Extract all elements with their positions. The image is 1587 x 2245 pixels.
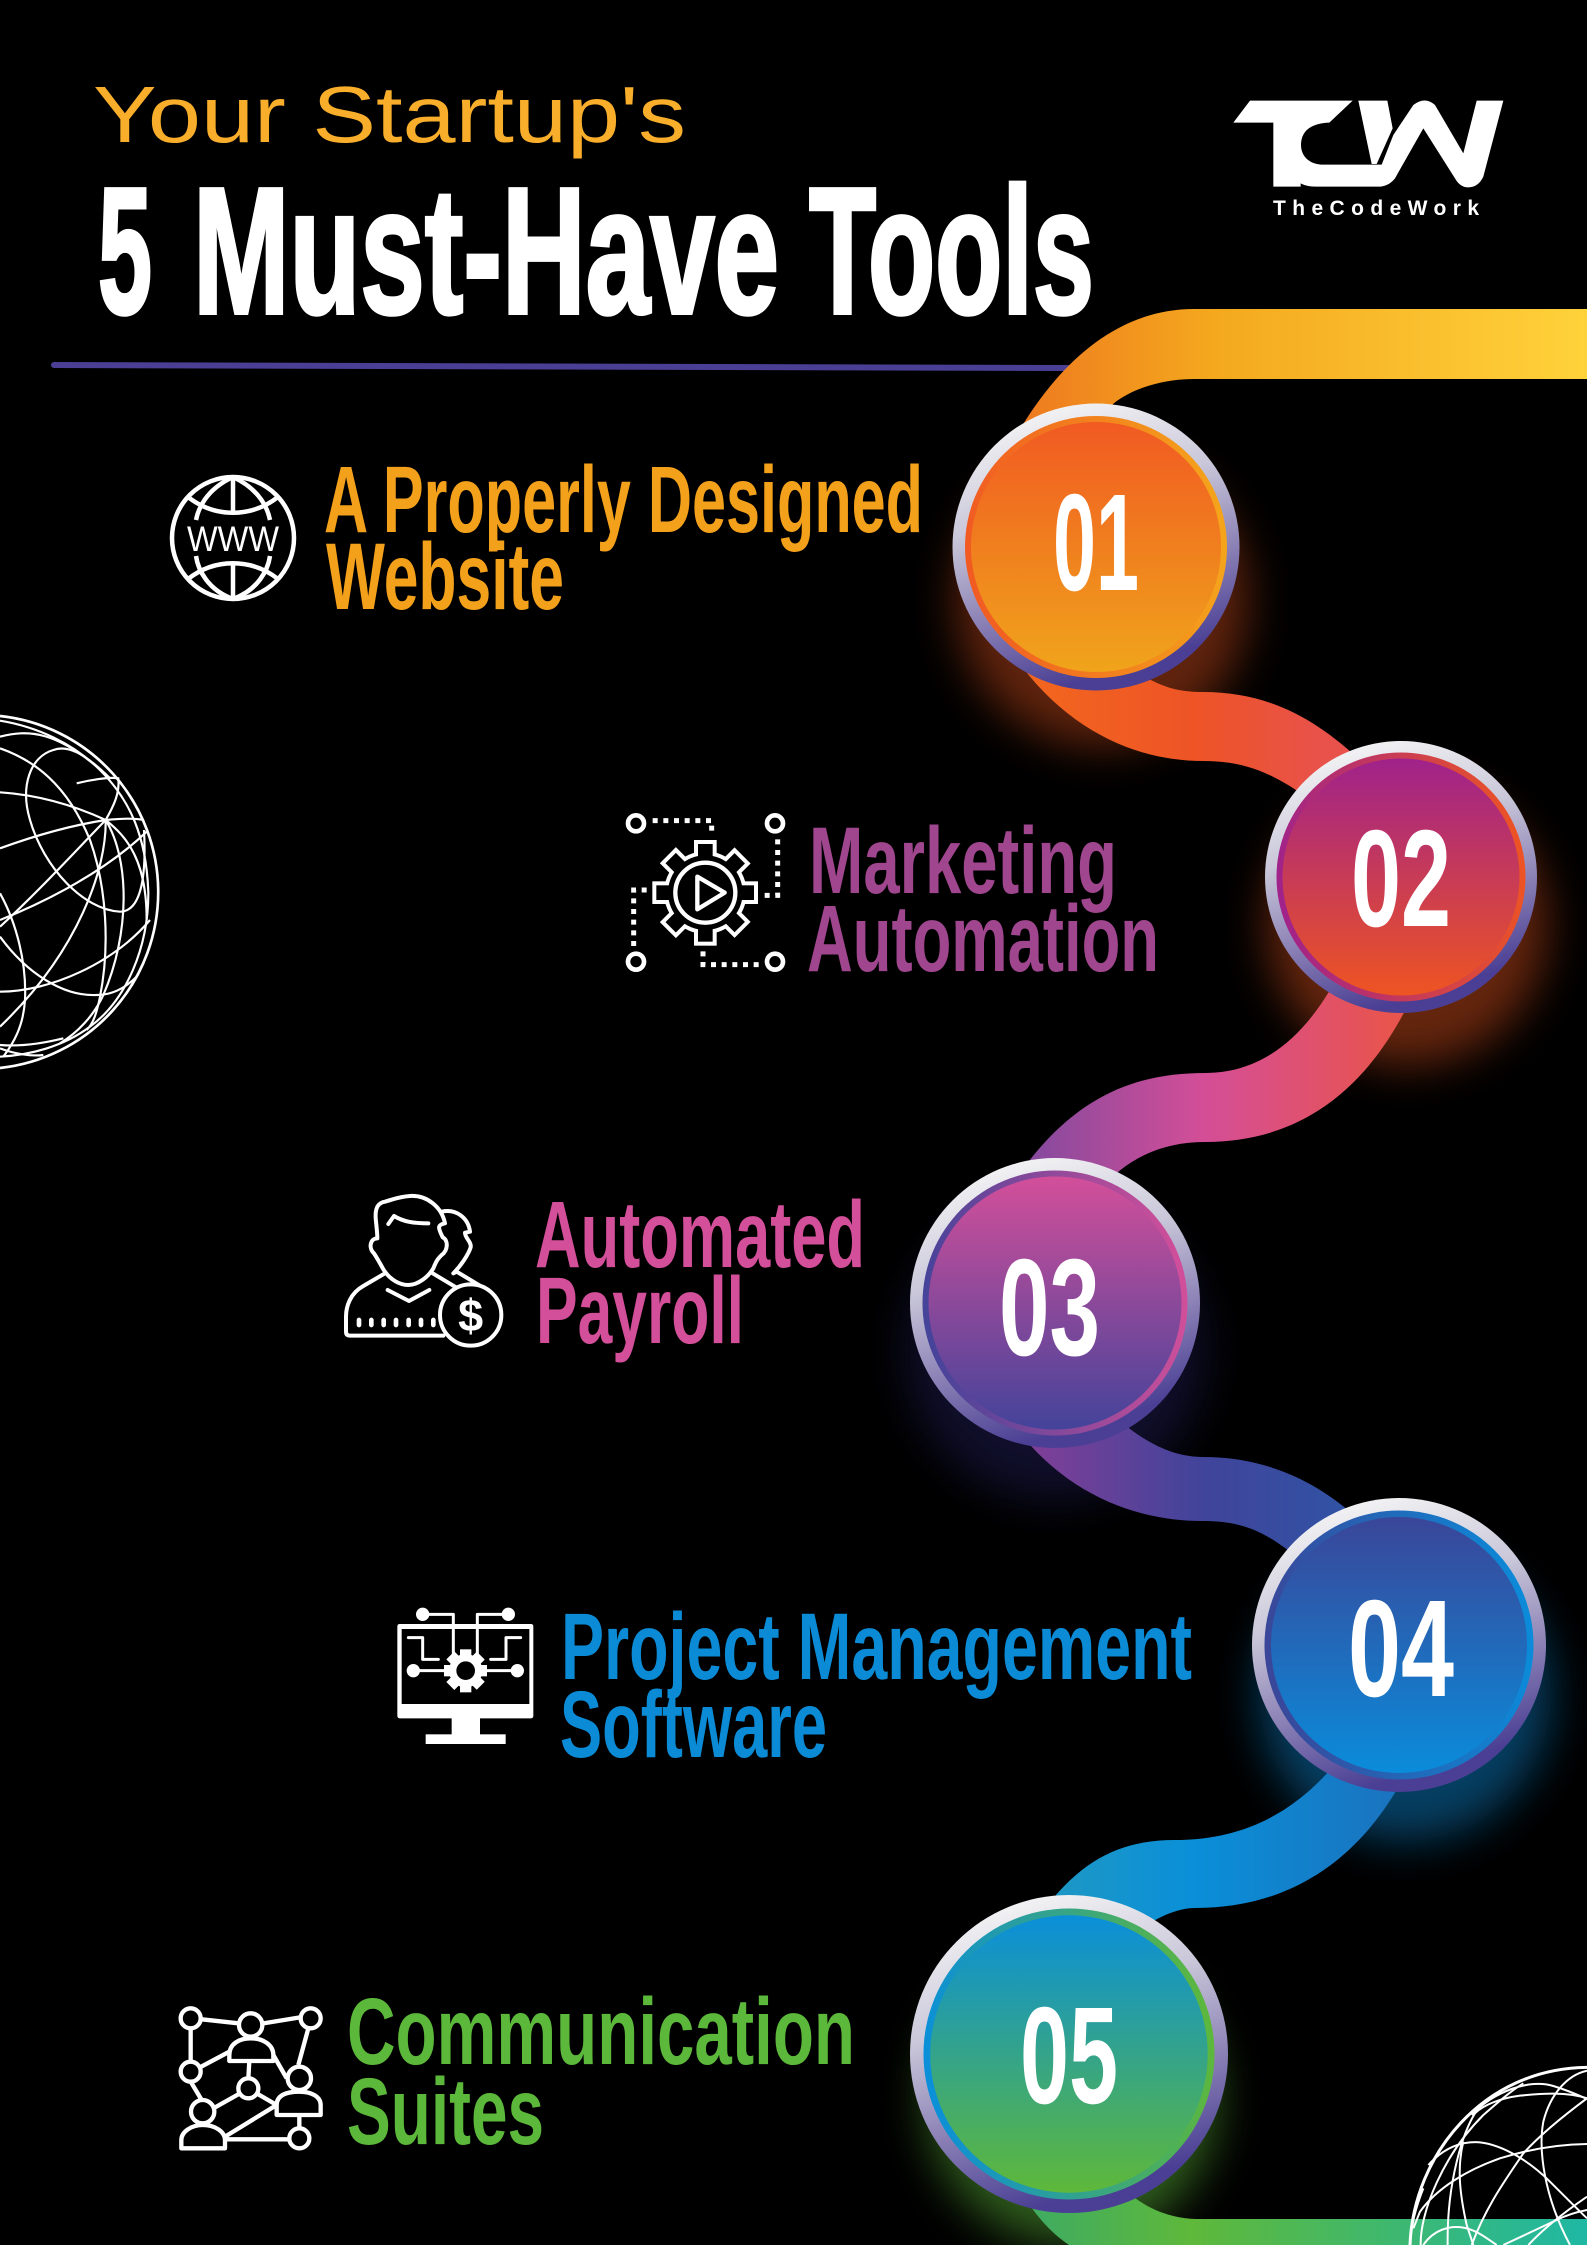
glow: circle 02 (1267, 785, 1547, 1065)
ribbon segment: top to 01 (985, 309, 1587, 500)
label: Automated Payroll: Automated (535, 1182, 865, 1288)
shoulders and torso (346, 1273, 443, 1336)
head and hair (371, 1196, 447, 1285)
label: Automated Payroll (535, 1182, 865, 1364)
step badge 04 (1252, 1498, 1546, 1792)
label: Communication Suites: Suites (347, 2059, 544, 2165)
glow: circle 01 (956, 454, 1248, 746)
step badge 02: 02 (1351, 802, 1451, 956)
label: A Properly Designed Website: A Properly Designed (324, 447, 923, 553)
icon: www globe: WWW (187, 520, 279, 559)
dotted connectors (634, 821, 778, 965)
network nodes (181, 2008, 201, 2028)
connecting lines (191, 2017, 308, 2139)
label: Marketing Automation: Automation (807, 886, 1159, 992)
label: Project Management Software: Project Management (561, 1594, 1192, 1700)
glow: circle 05 (926, 1952, 1218, 2244)
gear centre and play symbol (675, 863, 735, 923)
glow: circle 03 (905, 1200, 1205, 1500)
label: Project Management Software (560, 1594, 1192, 1778)
step badge 02 (1265, 741, 1537, 1013)
ribbon segment: 04 to 05 (1040, 1770, 1405, 1930)
title line: Your Startup's: Your Startup's (93, 70, 686, 159)
ribbon path (985, 309, 1587, 2245)
icon: marketing automation gear (628, 815, 783, 970)
icon: payroll person with dollar (346, 1196, 501, 1346)
dollar coin (440, 1284, 501, 1346)
ribbon segment: 01 to 02 (1010, 650, 1370, 800)
step badge 04: 04 (1348, 1572, 1454, 1726)
logo: TheCodeWork: TheCodeWork (1273, 197, 1479, 220)
logo: TheCodeWork (1233, 100, 1503, 220)
step badge 03: 03 (999, 1231, 1100, 1385)
label: Automated Payroll: Payroll (536, 1258, 744, 1364)
icon: www globe (172, 477, 294, 599)
label: A Properly Designed Website: Website (326, 524, 564, 630)
ribbon segment: 02 to 03 (1015, 990, 1415, 1190)
ribbon segment: 05 to bottom (1020, 2190, 1587, 2245)
icon: communication network (181, 2008, 321, 2148)
label: Marketing Automation: Marketing (809, 808, 1117, 914)
glow: circle 04 (1259, 1549, 1551, 1841)
people bodies (229, 2038, 273, 2061)
label: Marketing Automation (807, 808, 1159, 992)
label: Project Management Software: Software (560, 1672, 827, 1778)
monitor body (397, 1624, 533, 1718)
globe wireframe: left (0, 716, 158, 1068)
label: Communication Suites (347, 1979, 855, 2165)
step badge 01 (952, 404, 1240, 690)
globe wireframe: bottom right (1410, 2067, 1587, 2245)
divider line (54, 365, 1070, 368)
label: A Properly Designed Website (324, 447, 923, 630)
label: Communication Suites: Communication (347, 1979, 855, 2085)
icon: project management monitor (397, 1608, 533, 1744)
gear outline (652, 840, 758, 946)
step badge 05 (910, 1895, 1228, 2213)
title line: 5 Must-Have Tools: Must-Have (193, 151, 779, 352)
circuit lines (408, 1614, 521, 1671)
icon: payroll person with dollar: $ (458, 1290, 483, 1341)
corner nodes (628, 815, 783, 970)
circuit nodes (407, 1608, 524, 1692)
ribbon segment: 03 to 04 (1010, 1420, 1370, 1560)
step badge 01: 01 (1053, 466, 1139, 620)
title line: 5 Must-Have Tools: Tools (809, 151, 1094, 352)
step badge 03 (910, 1158, 1200, 1448)
step badge 05: 05 (1020, 1979, 1118, 2133)
title line: 5 Must-Have Tools: 5 (98, 151, 152, 352)
second person behind (442, 1211, 482, 1287)
